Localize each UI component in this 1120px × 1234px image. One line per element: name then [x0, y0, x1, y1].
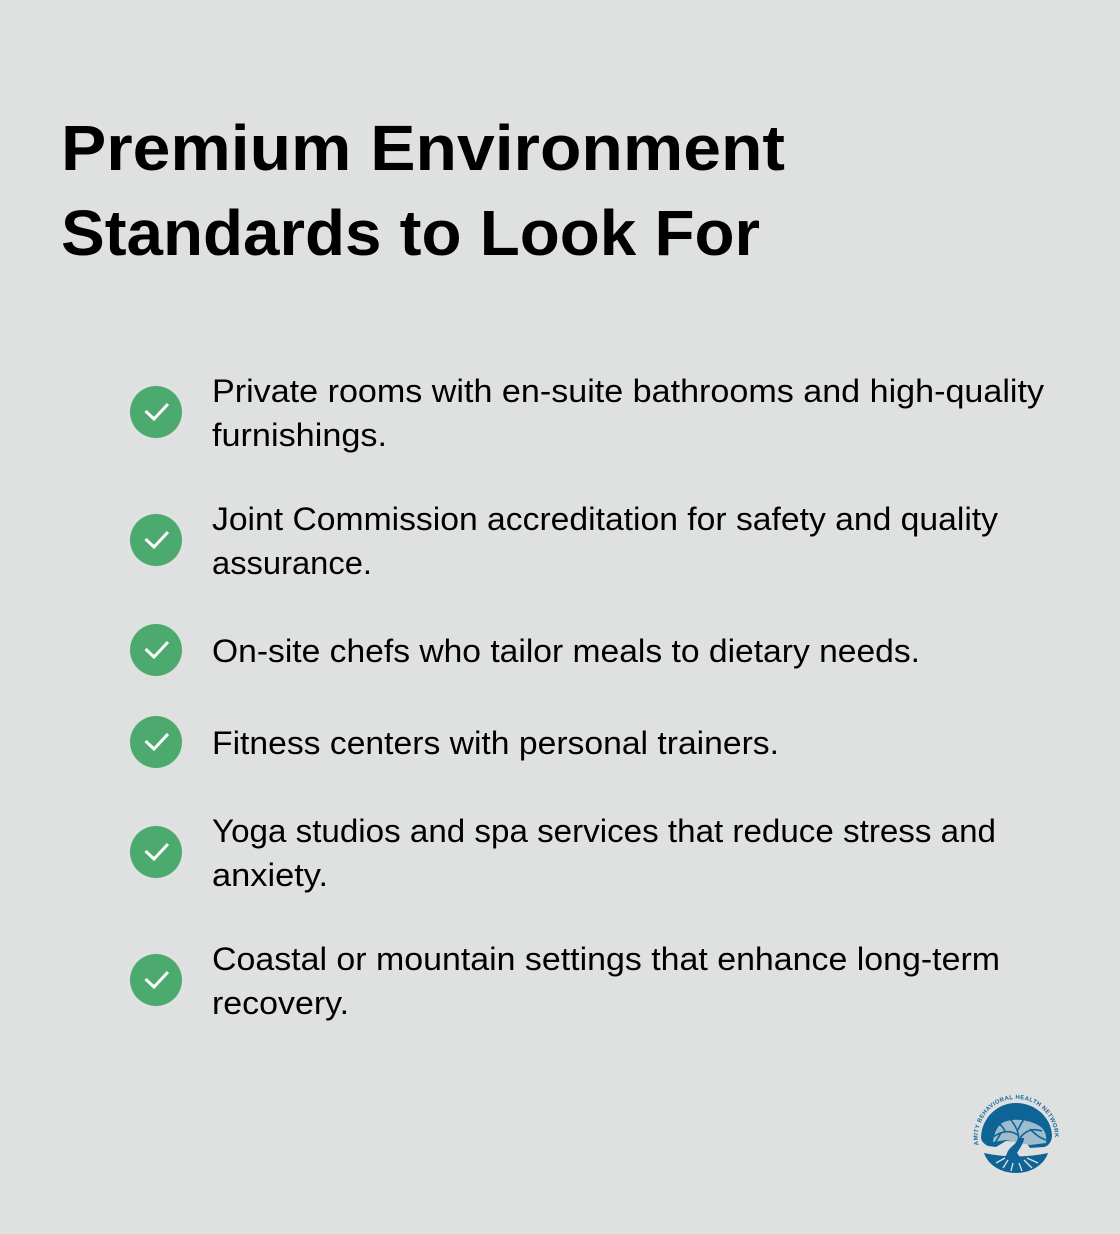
list item: fitness: Fitness centers with personal trainers. [212, 725, 779, 761]
icon: check [130, 954, 182, 1006]
logo text: AMITY BEHAVIORAL HEALTH NETWORK [974, 1094, 1059, 1145]
tree canopy [981, 1103, 1052, 1148]
title: Standards to Look For [61, 197, 760, 269]
list item: private rooms: furnishings. [212, 417, 387, 453]
title: Premium Environment [61, 112, 785, 184]
list item: accreditation [130, 501, 998, 581]
icon: check [130, 514, 182, 566]
list item: settings [130, 941, 1000, 1021]
title [61, 112, 785, 269]
logo: Amity Behavioral Health Network [974, 1094, 1059, 1173]
icon: check [130, 826, 182, 878]
list item: yoga: Yoga studios and spa services that reduce stress and [212, 813, 996, 849]
tree trunk [1004, 1138, 1024, 1160]
list item: accreditation: assurance. [212, 545, 372, 581]
list item: yoga: anxiety. [212, 857, 328, 893]
list item: accreditation: Joint Commission accreditation for safety and quality [212, 501, 998, 537]
list item: chefs: On-site chefs who tailor meals to dietary needs. [212, 633, 920, 669]
list item: settings: recovery. [212, 985, 349, 1021]
list item: private rooms [130, 373, 1044, 453]
list item: private rooms: Private rooms with en-suite bathrooms and high-quality [212, 373, 1044, 409]
list item: fitness [130, 716, 779, 768]
root gaps [996, 1158, 1038, 1171]
icon: check [130, 716, 182, 768]
canopy light patches [993, 1120, 1046, 1145]
list item: chefs [130, 624, 920, 676]
list item: settings: Coastal or mountain settings that enhance long-term [212, 941, 1000, 977]
icon: check [130, 624, 182, 676]
list item: yoga [130, 813, 996, 893]
tree branches [993, 1119, 1046, 1146]
roots bowl [984, 1153, 1048, 1173]
icon: check [130, 386, 182, 438]
